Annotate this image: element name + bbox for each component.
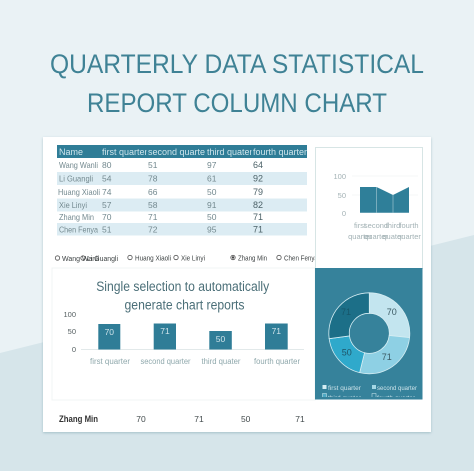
axis labels: quater xyxy=(382,232,404,241)
panel: donut chart xyxy=(315,268,422,402)
axis labels xyxy=(333,172,421,241)
donut legend: second quarter xyxy=(377,385,418,392)
selected row summary: 71 xyxy=(295,414,305,424)
row: Zhang Min: 70 xyxy=(102,212,112,222)
bar values: 70 xyxy=(105,327,114,337)
panel: main column chart xyxy=(52,268,315,400)
title xyxy=(50,49,424,118)
row: Zhang Min: Zhang Min xyxy=(59,212,94,222)
row: Zhang Min: 71 xyxy=(253,212,263,222)
row: Chen Fenya: 72 xyxy=(148,224,158,234)
donut legend: first quarter xyxy=(328,385,362,392)
axis labels: 50 xyxy=(338,191,346,200)
radio selector: Huang Xiaoli xyxy=(135,256,171,262)
row: Zhang Min xyxy=(59,212,263,222)
row: Zhang Min: 50 xyxy=(207,212,217,222)
row: Chen Fenya: Chen Fenya xyxy=(59,224,98,234)
selected row summary: 71 xyxy=(194,414,204,424)
panel: report card xyxy=(43,137,431,432)
row: Xie Linyi xyxy=(59,200,263,210)
radio selector: Xie Linyi xyxy=(181,256,205,262)
category labels: second quarter xyxy=(140,357,191,366)
row: Wang Wanli xyxy=(59,160,263,170)
axis labels: third xyxy=(386,221,400,230)
row: Li Guangli: 61 xyxy=(207,174,217,184)
row: Wang Wanli: 97 xyxy=(207,160,217,170)
row: Li Guangli: Li Guangli xyxy=(59,174,93,184)
donut values xyxy=(341,307,397,362)
row: Chen Fenya: 95 xyxy=(207,224,217,234)
data table xyxy=(57,145,307,236)
table header: Name xyxy=(59,147,83,157)
donut legend: third quater xyxy=(328,395,362,402)
radio selector: Li Guangli xyxy=(87,256,118,263)
axis labels: second xyxy=(364,221,388,230)
category labels: third quater xyxy=(202,357,241,366)
table header: second quarter xyxy=(148,147,208,157)
row: Wang Wanli: 51 xyxy=(148,160,158,170)
row: Zhang Min: 71 xyxy=(148,212,158,222)
category labels xyxy=(90,357,300,366)
gridlines xyxy=(352,176,418,195)
row: Li Guangli xyxy=(59,174,263,184)
title: REPORT COLUMN CHART xyxy=(87,88,387,118)
row: Huang Xiaoli: 79 xyxy=(253,187,263,197)
selected row summary: 70 xyxy=(136,414,146,424)
y axis labels: 100 xyxy=(63,310,76,319)
donut values: 50 xyxy=(342,348,352,358)
row: Li Guangli: 92 xyxy=(253,174,263,184)
table header: fourth quarter xyxy=(253,147,307,157)
selected row summary xyxy=(59,414,305,424)
category labels: first quarter xyxy=(90,357,130,366)
row: Xie Linyi: 57 xyxy=(102,200,112,210)
row: Xie Linyi: Xie Linyi xyxy=(59,200,87,210)
y axis labels xyxy=(63,310,76,354)
radio selector: Zhang Min xyxy=(238,256,267,262)
panel: small area chart xyxy=(316,148,422,268)
radio selector: Wang Wanli xyxy=(62,256,100,263)
axis labels: fourth xyxy=(399,221,419,230)
row: Chen Fenya: 51 xyxy=(102,224,112,234)
row: Li Guangli: 54 xyxy=(102,174,112,184)
y axis labels: 50 xyxy=(68,327,76,336)
radio selector xyxy=(55,255,318,263)
axis labels: 0 xyxy=(342,209,346,218)
chart title: generate chart reports xyxy=(124,298,245,312)
axis labels: 100 xyxy=(333,172,346,181)
donut values: 71 xyxy=(382,352,392,362)
selected row summary: 50 xyxy=(241,414,251,424)
y axis labels: 0 xyxy=(72,345,76,354)
bar values: 71 xyxy=(272,326,281,336)
axis labels: quarter xyxy=(348,232,372,241)
donut values: 70 xyxy=(387,307,397,317)
row: Wang Wanli: 80 xyxy=(102,160,112,170)
row: Huang Xiaoli: Huang Xiaoli xyxy=(58,187,100,197)
donut legend xyxy=(322,385,417,397)
row: Huang Xiaoli: 50 xyxy=(207,187,217,197)
table header: first quarter xyxy=(102,147,148,157)
row: Xie Linyi: 58 xyxy=(148,200,158,210)
table header xyxy=(57,145,307,158)
bar values xyxy=(105,326,281,344)
axis labels: quarter xyxy=(364,232,388,241)
table row bands xyxy=(57,172,307,236)
row: Chen Fenya: 71 xyxy=(253,224,263,234)
row: Xie Linyi: 82 xyxy=(253,200,263,210)
selected row summary: Zhang Min xyxy=(59,414,98,424)
title: QUARTERLY DATA STATISTICAL xyxy=(50,49,424,79)
chart title xyxy=(96,279,269,312)
axis labels: first xyxy=(354,221,367,230)
donut segments xyxy=(329,293,410,374)
table header: third quater xyxy=(207,147,253,157)
row: Huang Xiaoli: 66 xyxy=(148,187,158,197)
row: Huang Xiaoli xyxy=(58,187,263,197)
category labels: fourth quarter xyxy=(254,357,300,366)
row: Li Guangli: 78 xyxy=(148,174,158,184)
row: Wang Wanli: 64 xyxy=(253,160,263,170)
axis labels: quarter xyxy=(397,232,421,241)
column bars xyxy=(98,324,288,350)
donut values: 71 xyxy=(341,307,351,317)
radio selector: Chen Fenya xyxy=(284,256,318,262)
row: Xie Linyi: 91 xyxy=(207,200,217,210)
area series xyxy=(360,187,409,213)
row: Wang Wanli: Wang Wanli xyxy=(59,160,98,170)
bar values: 71 xyxy=(160,326,170,336)
chart title: Single selection to automatically xyxy=(96,279,269,294)
row: Huang Xiaoli: 74 xyxy=(102,187,112,197)
row: Chen Fenya xyxy=(59,224,263,234)
bar values: 50 xyxy=(216,334,225,344)
donut legend: fourth quarter xyxy=(377,395,416,402)
